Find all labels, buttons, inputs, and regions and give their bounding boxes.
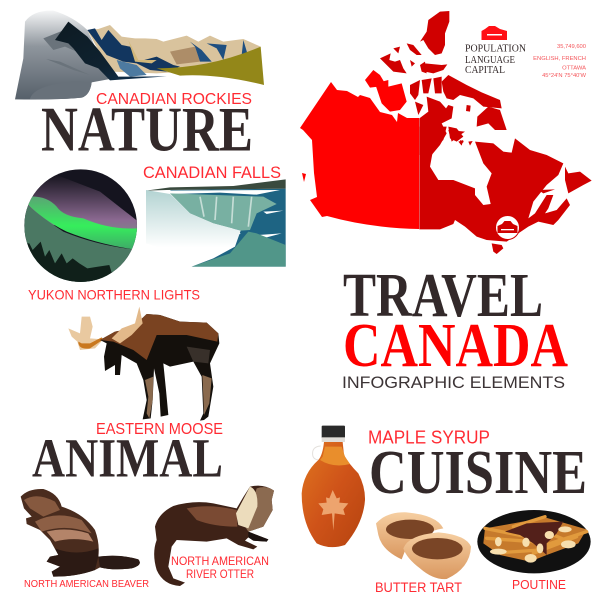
- heading: Animal: ANIMAL: [32, 428, 223, 488]
- values: population, language, capital: 35,749,600: [557, 44, 586, 50]
- labels: population, language, capital: [465, 42, 526, 76]
- illustration: North American river otter: [154, 486, 274, 586]
- label: North American River Otter: [171, 554, 269, 581]
- label: Maple Syrup: MAPLE SYRUP: [368, 428, 490, 448]
- illustration: North American beaver: [21, 489, 140, 577]
- label: Canadian Rockies: CANADIAN ROCKIES: [96, 91, 252, 108]
- illustration: maple syrup bottle: [302, 426, 365, 547]
- label: Yukon Northern Lights: YUKON NORTHERN LIGHTS: [28, 288, 200, 302]
- values: population, language, capital: OTTAWA: [562, 66, 586, 72]
- title: Travel Canada: [342, 262, 568, 392]
- labels: population, language, capital: POPULATION: [465, 42, 526, 54]
- map: arctic islands: [365, 11, 507, 155]
- values: population, language, capital: 45°24'N 75°40'W: [542, 73, 587, 79]
- map: eastern mainland: [419, 127, 592, 254]
- title: Travel Canada: TRAVEL: [343, 262, 543, 330]
- label: Canadian Falls: CANADIAN FALLS: [143, 164, 281, 182]
- label: North American Beaver: NORTH AMERICAN BEAVER: [24, 578, 149, 590]
- illustration: Yukon northern lights: [23, 168, 140, 283]
- illustration: Canadian Rockies: [15, 11, 264, 99]
- label: Butter Tart: BUTTER TART: [375, 580, 462, 595]
- label: North American River Otter: NORTH AMERICAN: [171, 554, 269, 568]
- map: western provinces: [300, 82, 419, 229]
- heading: Nature: NATURE: [41, 94, 253, 164]
- illustration: Eastern moose: [68, 307, 219, 421]
- icon: parliament building: [482, 26, 507, 40]
- icon: Ottawa marker: [496, 216, 520, 240]
- map: Canada: [300, 11, 592, 254]
- label: Eastern Moose: EASTERN MOOSE: [96, 421, 223, 438]
- illustration: poutine: [477, 510, 591, 573]
- labels: population, language, capital: LANGUAGE: [465, 54, 515, 66]
- label: North American River Otter: RIVER OTTER: [186, 567, 254, 581]
- illustration: butter tarts: [376, 512, 471, 579]
- title: Travel Canada: INFOGRAPHIC ELEMENTS: [342, 373, 565, 392]
- label: Poutine: POUTINE: [512, 577, 566, 592]
- illustration: Canadian Falls: [146, 179, 286, 267]
- values: population, language, capital: [533, 44, 587, 79]
- labels: population, language, capital: CAPITAL: [465, 64, 505, 76]
- values: population, language, capital: ENGLISH, FRENCH: [533, 56, 586, 62]
- info block: country facts: [465, 26, 587, 79]
